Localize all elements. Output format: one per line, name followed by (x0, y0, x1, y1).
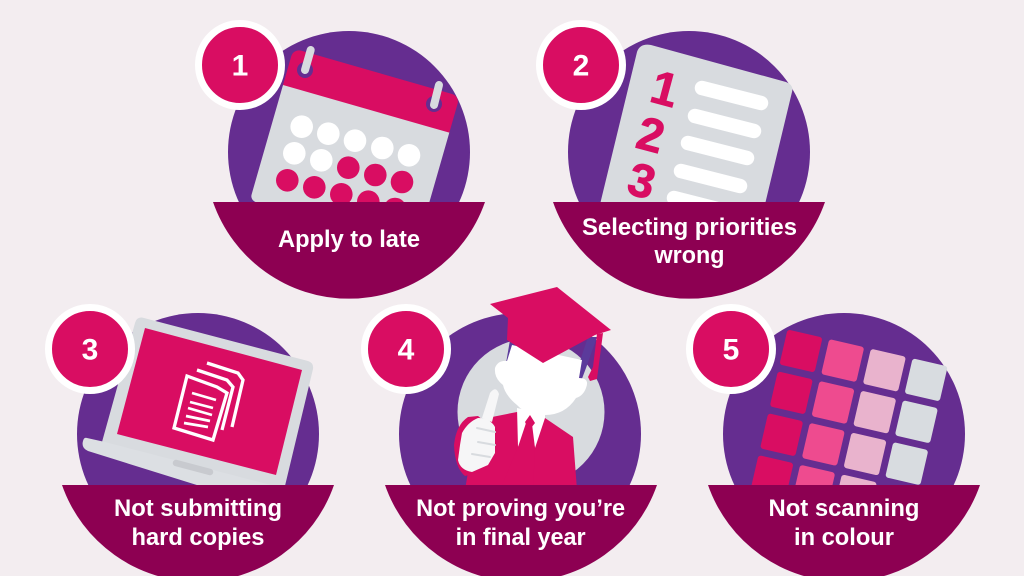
caption bowl 5 (708, 485, 980, 576)
caption bowl 4 (385, 485, 657, 576)
icon: numbered list: 3 (622, 152, 661, 209)
purple circle 1 (228, 31, 470, 273)
number badge 3: 3 (82, 334, 98, 366)
panel 5: not scanning in colour (690, 308, 980, 576)
icon: graduate (454, 287, 611, 490)
icon: laptop (83, 318, 313, 510)
number badge 4: 4 (398, 334, 415, 366)
number badge 1: 1 (232, 50, 248, 82)
caption bowl 4: in final year (456, 524, 586, 551)
icon: calendar (250, 48, 460, 248)
number badge 3 (48, 308, 132, 390)
purple circle 2 (568, 31, 810, 273)
icon: numbered list: 2 (631, 106, 670, 163)
caption bowl 2 (553, 202, 825, 299)
caption bowl 2: Selecting priorities (582, 214, 797, 241)
caption bowl 5: in colour (794, 524, 894, 551)
number badge 5 (690, 308, 772, 390)
panel 2: selecting priorities wrong (540, 24, 825, 299)
icon: numbered list: 1 (645, 60, 684, 117)
caption bowl 5: Not scanning (768, 495, 920, 522)
purple circle 3 (77, 313, 319, 555)
caption bowl 1: Apply to late (278, 226, 420, 253)
caption bowl 4: Not proving you’re (416, 495, 625, 522)
panel 4: not proving final year (364, 287, 657, 576)
icon: document stack (174, 363, 243, 440)
icon: numbered list (595, 45, 792, 225)
panel 3: not submitting hard copies (48, 308, 334, 576)
purple circle 5 (723, 313, 965, 555)
number badge 5: 5 (723, 334, 739, 366)
panel 1: apply too late (198, 24, 485, 299)
number badge 1 (198, 24, 282, 106)
purple circle 4 (399, 313, 641, 555)
caption bowl 3: hard copies (132, 524, 264, 551)
caption bowl 2: wrong (654, 242, 724, 269)
number badge 2 (540, 24, 622, 106)
caption bowl 1 (213, 202, 485, 299)
caption bowl 3: Not submitting (114, 495, 282, 522)
grey circle backdrop (458, 338, 604, 486)
caption bowl 3 (62, 485, 334, 576)
icon: colour swatch grid (750, 329, 948, 527)
number badge 2: 2 (573, 50, 589, 82)
number badge 4 (364, 308, 448, 390)
